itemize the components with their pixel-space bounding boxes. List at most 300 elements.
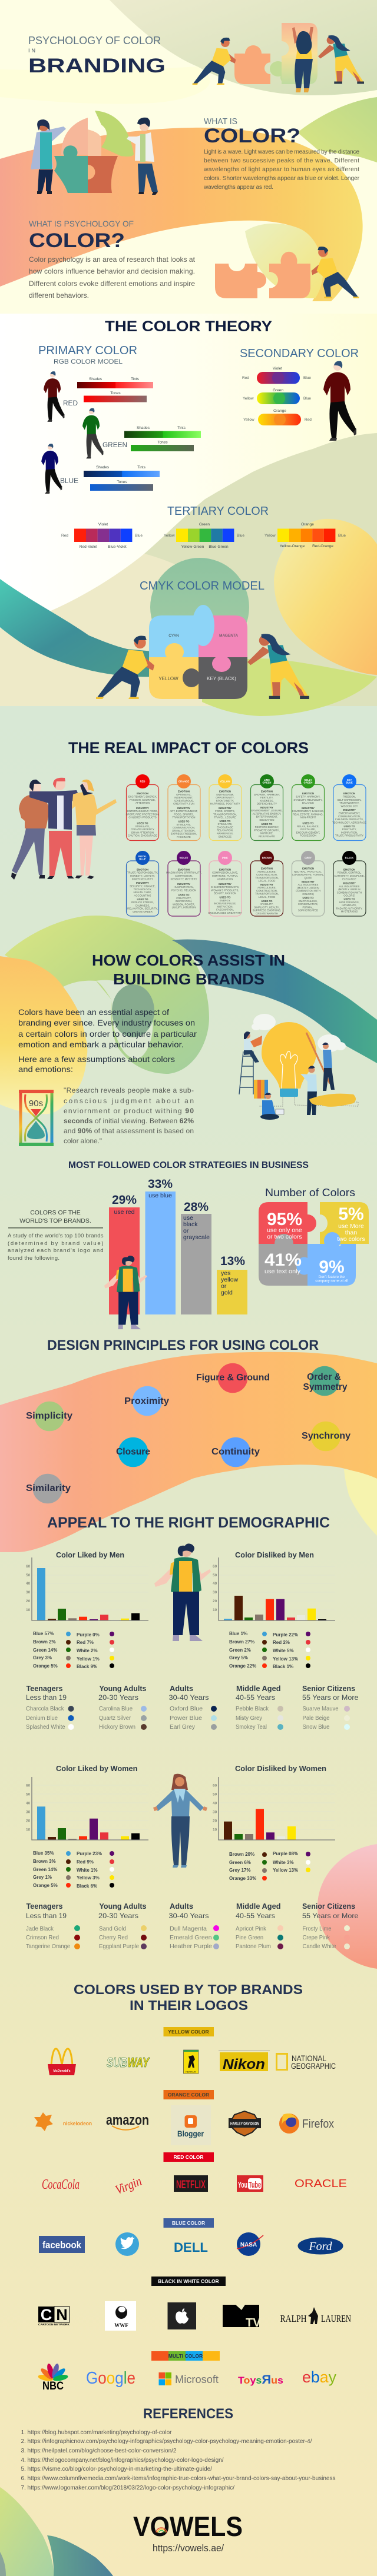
figure: man	[154, 1543, 211, 1641]
chart: violet tertiary bar: Blue-Violet	[108, 545, 127, 549]
legend: color liked by women: Green 14%	[33, 1867, 57, 1872]
tag: red color	[164, 2152, 214, 2162]
chart: orange tertiary bar: Red-Orange	[312, 544, 333, 548]
card: black	[333, 851, 366, 916]
principle: simplicity: Simplicity	[26, 1411, 72, 1421]
chart: violet tertiary bar	[61, 522, 143, 549]
figure: man with vest	[104, 1256, 147, 1329]
table: age group colors for women: Frosty Lime	[303, 1925, 332, 1932]
card: orange	[168, 774, 200, 840]
table: age group colors for men: Snow Blue	[303, 1723, 330, 1730]
background: pale disc	[245, 224, 323, 298]
chart: violet tertiary bar: Violet	[98, 522, 108, 527]
chart: cmyk puzzle: KEY (BLACK)	[207, 676, 236, 681]
card: violet: IMAGINATION, SPIRITUALITY,	[166, 871, 201, 874]
puzzle: grey piece	[259, 1234, 307, 1286]
card: red: DRAW ATTENTION	[131, 831, 154, 834]
logo: mcdonalds	[48, 2049, 76, 2075]
logo: amazon: amazon	[106, 2112, 149, 2128]
heading: references: REFERENCES	[143, 2406, 233, 2422]
chart: green mix pill	[243, 388, 311, 404]
legend: color liked by men: Black 9%	[77, 1664, 97, 1669]
card: lime green	[251, 774, 283, 840]
chart: green mix pill: Yellow	[243, 397, 254, 401]
heading: how colors assist in building brands: HOW COLORS ASSIST IN	[92, 951, 285, 969]
table: age group colors for men: Hickory Brown	[99, 1723, 135, 1730]
background: cream inner area	[0, 221, 322, 306]
table: age group colors for men: Oxford Blue	[170, 1705, 203, 1712]
chart: violet mix pill	[242, 367, 311, 384]
card: black: USED TO	[343, 898, 355, 900]
card: black: ALL INDUSTRIES	[339, 885, 359, 888]
text block: reference list: 5.	[21, 2466, 26, 2472]
card: sky blue: POSITIVITY,	[342, 828, 356, 831]
card: violet: INSPIRATION,	[176, 900, 192, 903]
tag: yellow color: YELLOW COLOR	[168, 2029, 209, 2035]
text block: research quote: color alone."	[64, 1137, 102, 1145]
text block: what is color: Light is a wave. Light waves can be measured by the distance	[204, 149, 359, 155]
card: pink: INDUSTRY	[219, 883, 232, 886]
legend: color liked by women: Orange 5%	[33, 1883, 58, 1888]
legend: color disliked by men: Grey 5%	[229, 1655, 248, 1660]
chart: color meaning cards row two	[126, 851, 366, 916]
principle: continuity: Continuity	[211, 1447, 260, 1457]
legend: color liked by women: Blue 35%	[33, 1851, 54, 1856]
card: yellow: ENCOURAGE	[217, 826, 233, 828]
card: pink: MOTIVATION,	[217, 905, 233, 908]
card: kelly green: SAFETY, HARMONY,	[296, 796, 320, 798]
chart: number of colors puzzle: Don't feature the	[319, 1276, 345, 1279]
chart: color meaning cards row one	[126, 774, 366, 840]
card: red: STIMULATE,	[135, 825, 150, 828]
bar chart: color disliked by women: Color Disliked by Women	[235, 1764, 326, 1773]
logo: nasa	[237, 2232, 263, 2256]
legend: color disliked by women: Yellow 13%	[273, 1868, 298, 1873]
card: sky blue: COMMUNICATION,	[338, 815, 361, 818]
chart: green scale bars: Shades	[137, 426, 150, 430]
panel: primary color	[38, 344, 201, 494]
table: age group colors for women: Young Adults	[99, 1902, 147, 1911]
card: orange: FOOD, SPORTS,	[174, 813, 194, 816]
legend: color disliked by women: Grey 17%	[229, 1868, 250, 1873]
card: yellow: SPONTANEITY,	[216, 799, 234, 802]
heading: tertiary color: TERTIARY COLOR	[167, 505, 269, 518]
card: orange: STIMULATE,	[177, 823, 191, 826]
principle: order and symmetry	[303, 1366, 348, 1396]
background: teal corner blob	[47, 2535, 113, 2576]
text block: colors of the world's top brands	[8, 1209, 104, 1262]
legend: color disliked by men: White 5%	[273, 1648, 294, 1653]
heading: colors used by top brands	[74, 1982, 303, 2013]
logo: ferrari	[184, 2050, 199, 2074]
text block: colors of the world's top brands: (determined by brand value)	[8, 1240, 104, 1247]
heading: colors used by top brands: IN THEIR LOGOS	[130, 1998, 248, 2013]
tag: multi color: MULTI COLOR	[168, 2353, 203, 2359]
legend: color liked by women: Red 9%	[77, 1859, 94, 1865]
chart: number of colors puzzle	[259, 1187, 369, 1286]
principle: similarity: Similarity	[26, 1483, 71, 1493]
text block: reference list: https://visme.co/blog/color-psychology-in-marketing-the-ultimate-guide/	[27, 2466, 212, 2472]
icon: paint palette	[309, 1094, 356, 1107]
legend: color liked by men: Blue 57%	[33, 1631, 54, 1636]
card: pink: ADMIRATION	[217, 877, 233, 880]
icon: rainbow hourglass: 90s	[29, 1099, 43, 1109]
card: royal blue: CREATE ORDER	[133, 910, 153, 913]
logo: mtv	[223, 2305, 261, 2329]
chart: cmyk puzzle: CYAN	[168, 634, 179, 638]
card: violet: COMPASSION,	[175, 874, 193, 877]
chart: number of colors puzzle: than	[345, 1229, 357, 1236]
logo: subway: SUBWAY	[107, 2055, 150, 2070]
card: kelly green: EMOTION	[302, 792, 314, 795]
bar chart: color disliked by men: 30	[213, 1590, 217, 1595]
logo: ford	[298, 2238, 343, 2254]
chart: violet mix pill: Violet	[273, 367, 282, 371]
icon: bulb filament	[280, 1051, 297, 1089]
text block: reference list	[21, 2429, 336, 2491]
legend: color liked by women: White 1%	[77, 1868, 98, 1873]
table: age group colors for women: Jade Black	[26, 1925, 54, 1932]
bar chart: color liked by women: 60	[26, 1784, 31, 1788]
chart: green mix pill: Green	[273, 388, 283, 392]
logo: mcdonalds: McDonald's	[54, 2069, 71, 2073]
card: brown: USED TO	[261, 900, 273, 903]
card: lime green: USED TO	[261, 823, 273, 826]
text block: colors of the world's top brands: A study of the world's top 100 brands	[8, 1233, 104, 1239]
bar chart: color disliked by women: 60	[213, 1784, 217, 1788]
card: violet: PSYCHIC, RELIGION	[171, 888, 196, 891]
logo: facebook: facebook	[42, 2239, 81, 2251]
bar chart: color disliked by men	[213, 1550, 335, 1620]
bar: use black or grayscale: or	[183, 1227, 189, 1234]
panel: tertiary color	[61, 505, 346, 549]
text block: what is color: wavelengths of light appear to human eyes as different	[203, 167, 359, 173]
card: lime green: EMOTION	[261, 790, 273, 793]
text block: reference list: 6.	[21, 2475, 26, 2482]
icon: cyan knob	[192, 605, 214, 646]
card: sky blue: USED TO	[343, 825, 355, 828]
chart: cmyk puzzle: MAGENTA	[219, 634, 238, 638]
chart: blue scale bars: Tints	[137, 465, 146, 470]
legend: color liked by women: Brown 3%	[33, 1859, 56, 1864]
chart: number of colors puzzle: 95%	[267, 1210, 302, 1229]
card: brown: EMOTION	[261, 867, 273, 870]
card: violet: SENSIVITY, MYSTERY	[171, 877, 197, 880]
figure: scientist woman	[31, 119, 66, 194]
figure: pushing woman	[247, 634, 309, 699]
card: kelly green: REAL ESTATE, FARMING,	[293, 813, 323, 816]
heading: number of colors: Number of Colors	[265, 1187, 355, 1199]
table: age group colors for women: Eggplant Purple	[99, 1943, 139, 1950]
card: sky blue: INDUSTRY	[343, 808, 356, 811]
icon: light bulb	[262, 1022, 316, 1089]
title	[28, 35, 166, 77]
text: website url: https://vowels.ae/	[153, 2542, 224, 2554]
card: lime green: GROWTH, HARMONY,	[254, 793, 280, 796]
illustration: man joining puzzle pieces	[215, 247, 359, 298]
card: lime green: NURTURE,	[260, 832, 273, 835]
table: age group colors for men: Teenagers	[26, 1685, 63, 1693]
logo: vowels: VOWELS	[133, 2511, 243, 2542]
legend: color liked by men: Purple 0%	[77, 1632, 100, 1638]
figure: blue sweater person	[41, 444, 62, 494]
logo: ralph lauren	[280, 2307, 351, 2324]
panel: what is color	[0, 97, 377, 306]
table: age group colors for men: Pale Beige	[303, 1715, 330, 1722]
bar chart: color disliked by men: 20	[213, 1599, 217, 1603]
logo: oracle: ORACLE	[295, 2178, 347, 2189]
panel: color theory	[0, 314, 377, 716]
card: orange: OPTIMISTIC,	[176, 793, 191, 796]
legend: color disliked by men: Yellow 13%	[273, 1656, 298, 1662]
card: red: CAUTION, ENCOURAGE	[128, 834, 157, 837]
illustration: team assembling puzzle	[193, 23, 364, 92]
illustration: group of three friends	[11, 778, 117, 880]
table: age group colors for men: Charcola Black	[26, 1705, 64, 1712]
card: kelly green: POSSESSION	[300, 834, 316, 837]
table: age group colors for women: Emerald Green	[170, 1934, 212, 1941]
legend: color disliked by men: Brown 27%	[229, 1639, 254, 1645]
bar chart: color disliked by women	[213, 1764, 335, 1840]
card: violet: INDUSTRY	[177, 883, 190, 886]
chart: violet tertiary bar: Blue	[135, 534, 143, 538]
card: pink: INCREASE PULSE,	[214, 902, 236, 905]
bar chart: color disliked by women: 40	[213, 1802, 217, 1805]
card: orange: DRAW ATTENTION,	[172, 829, 196, 832]
chart: red scale bars: Tints	[131, 377, 140, 381]
logo: wwf	[105, 2301, 136, 2331]
table: age group colors for men: 40-55 Years	[236, 1693, 275, 1702]
card: black: BLACK	[345, 857, 353, 859]
label: red: RED	[63, 399, 78, 407]
panel: the real impact of colors	[11, 739, 366, 916]
chart: green tertiary bar: Yellow	[164, 534, 175, 538]
chart: green scale bars: Tones	[157, 440, 168, 445]
card: pink: CHILDREN PRODUCTS,	[211, 886, 239, 888]
bar chart: color liked by men: Color Liked by Men	[56, 1550, 124, 1559]
card: brown: CONSTRUCTION,	[256, 873, 277, 876]
card: royal blue: INNER SECURITY	[132, 877, 153, 880]
bar chart: color liked by women: 30	[26, 1810, 31, 1815]
background: theory white area	[0, 314, 377, 706]
legend: color disliked by women	[229, 1851, 310, 1881]
text block: psychology of color: different behaviors.	[29, 291, 89, 299]
card: kelly green: REVITALIZE,	[300, 828, 316, 831]
logo: twitter	[115, 2232, 139, 2256]
tag: blue color	[164, 2218, 214, 2228]
bar chart: color liked by men: 10	[26, 1608, 31, 1612]
card: yellow: ENERGIZE	[219, 835, 232, 838]
text block: what is color: colors. Shorter wavelengths appear as blue or violet. Longer	[204, 175, 360, 182]
chart: number of colors puzzle: 41%	[264, 1250, 302, 1270]
card: grey: INDUSTRY	[302, 880, 315, 883]
logo: blogger	[171, 2105, 211, 2145]
card: sky blue: TRUSTWORTHY,	[339, 801, 359, 804]
legend: color liked by men: Grey 3%	[33, 1655, 52, 1660]
card: lime green: ALTERNATIVE ENERGY,	[253, 812, 281, 815]
chart: orange tertiary bar: Orange	[301, 522, 314, 527]
legend: color liked by men: Yellow 1%	[77, 1656, 100, 1662]
principle: closure: Closure	[116, 1447, 150, 1457]
text block: research quote: seconds of initial viewing. Between 62%	[64, 1117, 194, 1125]
icon: magenta piece	[199, 615, 247, 657]
principle: figure and ground: Figure & Ground	[196, 1373, 270, 1383]
card: lime green: ENTERTAINMENT,	[256, 816, 277, 818]
card: red: EXCITEMENT, ENERGY,	[128, 796, 157, 798]
bar chart: color liked by men: 60	[26, 1565, 31, 1569]
legend: color disliked by women: Orange 33%	[229, 1876, 256, 1881]
card: black: (MOSTLY USED IN	[338, 888, 361, 891]
card: black: MYSTERIOUS	[341, 910, 358, 913]
chart: blue scale bars: Tones	[117, 480, 127, 484]
card: sky blue: FREEDOM,	[343, 796, 356, 798]
card: yellow: INDUSTRY	[219, 807, 232, 810]
table: age group colors for men: Carolina Blue	[99, 1705, 133, 1712]
principle: order and symmetry: Symmetry	[303, 1382, 348, 1392]
icon: rainbow in logo	[156, 2528, 167, 2532]
logo: ferrari: FERRARI	[186, 2070, 196, 2074]
card: yellow: STIMULATE,	[218, 823, 232, 826]
bar: use black or grayscale	[181, 1200, 211, 1314]
icon: peach puzzle piece	[234, 45, 270, 84]
icon: yellow piece	[149, 657, 199, 699]
table: age group colors for women: Senior Citizens	[302, 1902, 355, 1911]
card: lime green: PROMOTE GROWTH,	[254, 828, 280, 831]
table: age group colors for women: Sand Gold	[99, 1925, 126, 1932]
card: orange: ART, ENTERTAINMENT,	[170, 810, 198, 813]
panel: colors used by top brands	[34, 1982, 351, 2392]
table: age group colors for men: Smokey Teal	[236, 1723, 267, 1730]
background: green top right blob	[297, 97, 377, 162]
card: kelly green: GREEN	[304, 781, 312, 784]
title: PSYCHOLOGY OF COLOR	[28, 35, 161, 46]
card: yellow: OPPORTUNITY,	[216, 796, 234, 799]
legend: color disliked by men: Purple 22%	[273, 1632, 298, 1638]
bar: use black or grayscale: 28%	[184, 1200, 209, 1214]
background: teal swoosh	[0, 579, 159, 677]
logo: blogger: Blogger	[177, 2129, 204, 2138]
chart: number of colors puzzle: two colors	[337, 1236, 365, 1243]
table: age group colors for men: Misty Grey	[236, 1715, 263, 1722]
card: pink: FASCINATION,	[216, 908, 234, 911]
card: sky blue: TRUST, PRODUCTIVITY	[335, 834, 363, 837]
bar chart: color liked by men: 50	[26, 1573, 31, 1577]
card: black: AUTHORITY, DISCIPLINE,	[334, 874, 365, 877]
chart: red scale bars	[77, 377, 153, 402]
chart: green tertiary bar: Blue	[237, 534, 244, 538]
text block: reference list: https://blog.hubspot.com/marketing/psychology-of-color	[27, 2429, 172, 2436]
table: age group colors for men: Quartz Silver	[99, 1715, 131, 1722]
card: violet: HUMANITARIAN,	[174, 886, 194, 888]
card: kelly green: ENVIRONMENT, BANKING,	[292, 810, 324, 813]
background: green ring	[5, 916, 209, 1074]
card: red: CREATE URGENCY	[131, 828, 154, 831]
logo: national geographic: GEOGRAPHIC	[291, 2061, 336, 2071]
card: violet	[166, 851, 201, 916]
table: age group colors for men: Less than 19	[26, 1693, 67, 1702]
table: age group colors for women: 20-30 Years	[98, 1912, 138, 1920]
card: lime green: GREEN	[263, 781, 271, 784]
card: red: INDUSTRY	[136, 807, 149, 810]
text block: colors of the world's top brands: WORLD'S TOP BRANDS.	[19, 1217, 91, 1224]
table: age group colors for men: 30-40 Years	[168, 1693, 209, 1702]
panel: design principles	[0, 1337, 377, 1552]
tag: yellow color	[164, 2027, 214, 2036]
text block: research quote: conscious judgment about an	[64, 1097, 194, 1105]
logo: mtv: TV	[246, 2317, 261, 2329]
card: royal blue: INDUSTRY	[136, 881, 149, 884]
card: kelly green: USED TO	[302, 821, 314, 825]
logo: cartoon network: CARTOON NETWORK	[38, 2323, 70, 2326]
title: IN	[28, 48, 37, 54]
bar chart: color liked by women: 40	[26, 1802, 31, 1805]
card: sky blue: SELF EXPRESSION,	[337, 798, 362, 801]
chart: green scale bars: Tints	[177, 426, 186, 430]
chart: red scale bars: Tones	[110, 391, 121, 395]
card: yellow: USED TO	[219, 820, 231, 823]
chart: red scale bars: Shades	[89, 377, 102, 381]
legend: color disliked by women: Purple 08%	[273, 1851, 298, 1856]
card: black: HIDE FEELINGS,	[339, 901, 359, 904]
card: royal blue: CALMNESS,	[135, 904, 150, 907]
legend: color disliked by men: Blue 1%	[229, 1631, 247, 1636]
bar: yes yellow or gold: yellow	[221, 1276, 239, 1283]
table: age group colors for women: Heather Purple	[170, 1943, 212, 1950]
bar: use black or grayscale: grayscale	[183, 1234, 210, 1241]
table: age group colors for women: Candle White	[303, 1943, 336, 1950]
logo: ralph lauren: LAUREN	[321, 2313, 351, 2324]
card: violet: VIOLET	[179, 857, 188, 859]
legend: color liked by women	[33, 1851, 114, 1889]
card: brown: LEGAL, FOOD	[259, 880, 275, 883]
logo: nikon: Nikon	[223, 2056, 265, 2072]
chart: number of colors puzzle: use text only	[264, 1269, 300, 1275]
card: kelly green: INDUSTRY	[302, 807, 315, 810]
panel: secondary color	[240, 347, 359, 441]
icon: clouds	[252, 1014, 346, 1052]
bar chart: color disliked by men: 50	[213, 1573, 217, 1577]
tag: red color: RED COLOR	[173, 2154, 204, 2160]
card: brown: AGRICULTURE,	[257, 870, 276, 873]
bar chart: color liked by men: 30	[26, 1590, 31, 1595]
logo: harley davidson	[229, 2111, 260, 2136]
table: age group colors for women: 40-55 Years	[236, 1912, 275, 1920]
card: sky blue: CHILDREN PRODUCTS,	[335, 818, 363, 821]
card: grey: USED TO	[302, 897, 314, 899]
chart: number of colors puzzle: 9%	[319, 1257, 345, 1277]
chart: number of colors puzzle: company name at all	[315, 1279, 348, 1283]
bar chart: color liked by men: 20	[26, 1599, 31, 1603]
card: yellow: ENTHUSIASM,	[216, 793, 234, 796]
background: orange yellow blob	[0, 956, 87, 1114]
text block: psychology of color: Different colors evoke different emotions and inspire	[29, 279, 195, 288]
figure: pushing woman	[318, 35, 364, 84]
card: yellow	[209, 774, 242, 840]
bar: use blue: use blue	[148, 1192, 172, 1199]
bar chart: brand colors	[104, 1177, 247, 1329]
panel: references and footer	[0, 2406, 336, 2576]
card: pink: PINK	[222, 857, 228, 859]
principle: closure	[116, 1437, 150, 1467]
table: age group colors for men: Splashed White	[26, 1723, 65, 1730]
text block: research quote: "Research reveals people make a sub-	[64, 1086, 194, 1094]
card: yellow: TRANSPORTATION,	[213, 813, 237, 816]
heading: what is color: WHAT IS	[204, 117, 237, 127]
table: age group colors for women: Middle Aged	[236, 1902, 280, 1911]
principle: continuity	[211, 1437, 260, 1467]
heading: how colors assist in building brands	[92, 951, 285, 988]
icon: bulb base	[280, 1089, 298, 1097]
